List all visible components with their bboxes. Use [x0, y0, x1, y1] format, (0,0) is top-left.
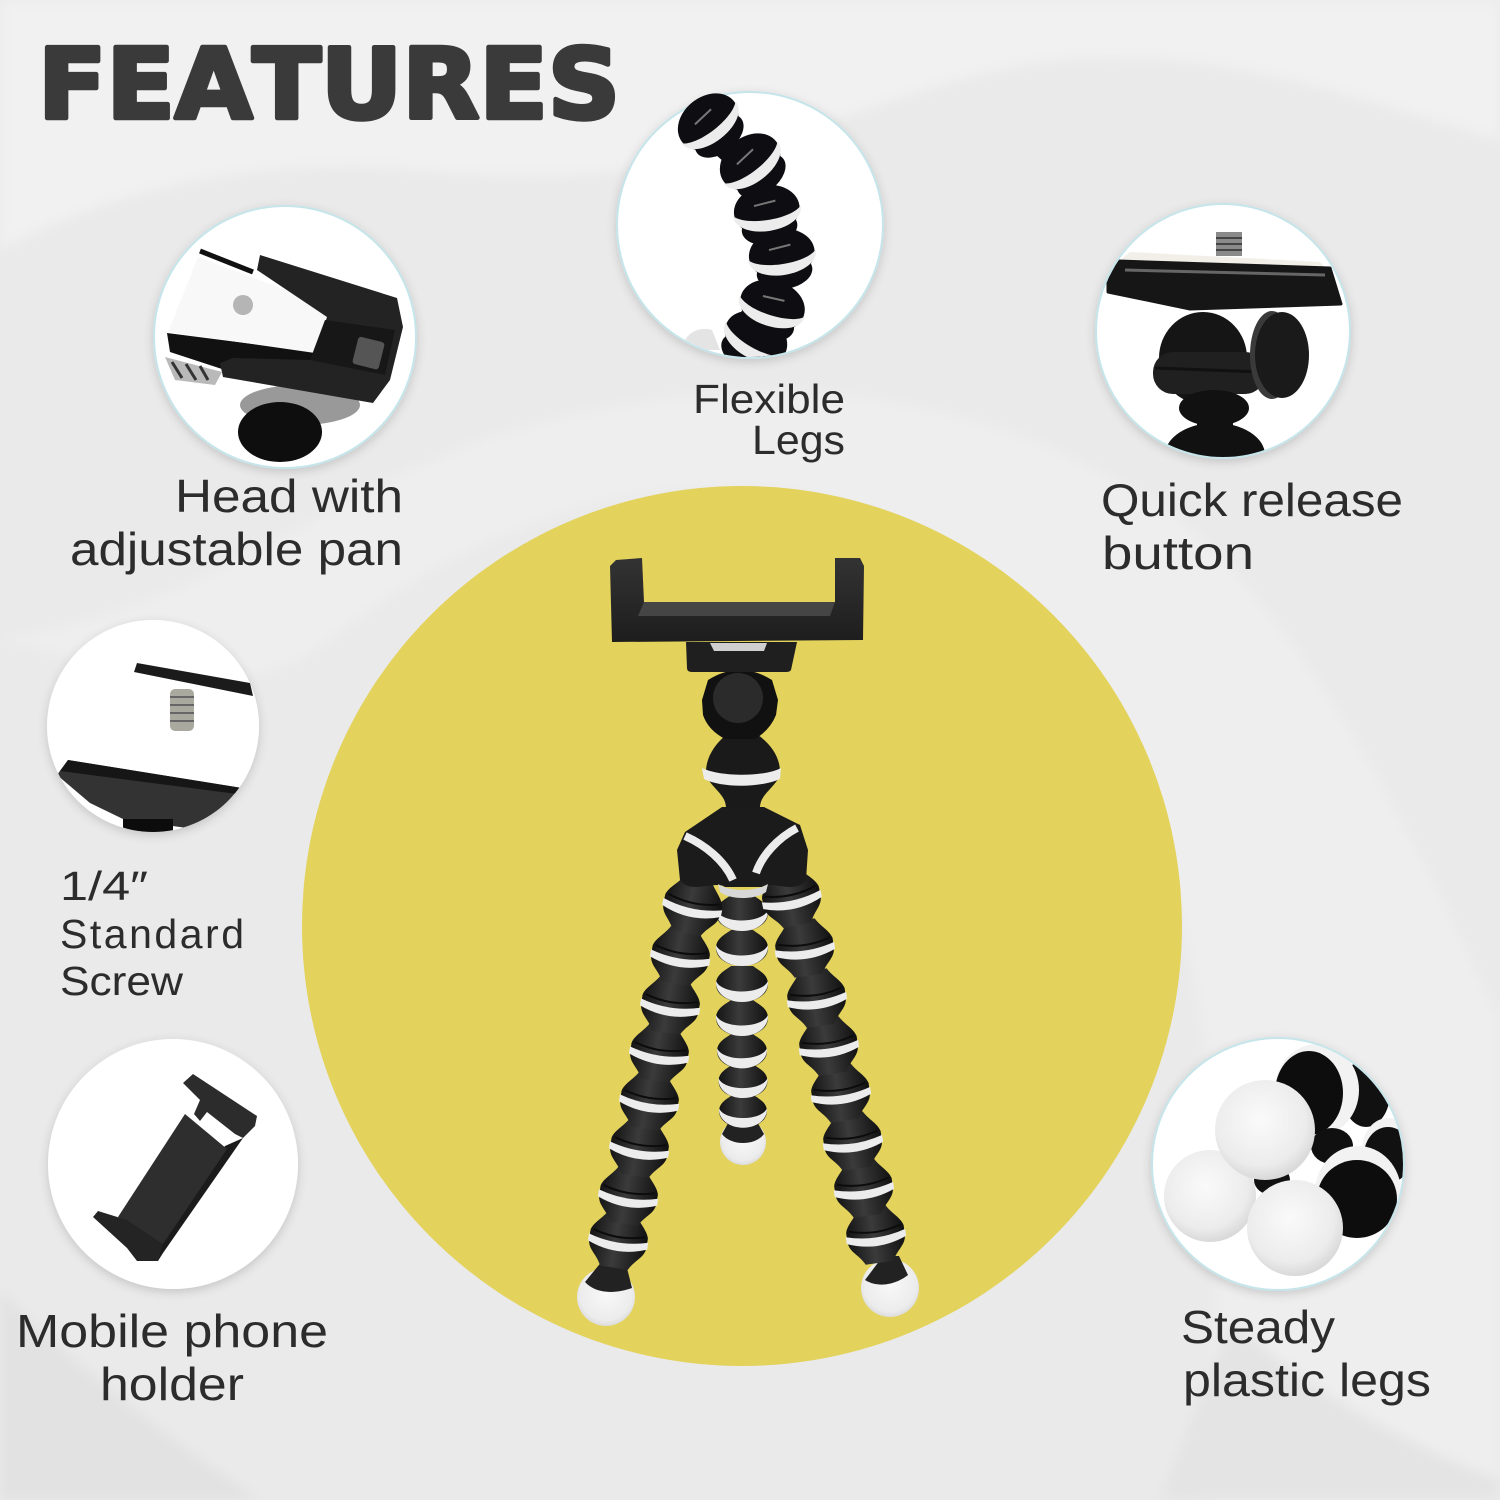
mount plate: [686, 642, 797, 672]
circle: mobile phone holder: [48, 1039, 298, 1289]
main tripod: [577, 558, 919, 1326]
label: standard screw: Standard: [60, 911, 244, 957]
label: mobile phone holder: holder: [100, 1358, 244, 1410]
label: steady plastic legs: Steady: [1181, 1301, 1335, 1353]
label: quick release button: Quick release: [1101, 474, 1403, 526]
label: standard screw: Screw: [60, 958, 183, 1004]
label: steady plastic legs: plastic legs: [1183, 1354, 1431, 1406]
label: quick release button: button: [1102, 527, 1254, 579]
pan head: [702, 670, 778, 739]
title: FEATURES: [38, 28, 620, 141]
label: mobile phone holder: [16, 1305, 328, 1410]
label: head with adjustable pan: Head with: [175, 470, 403, 522]
circle: steady plastic legs: [1152, 1038, 1414, 1290]
center leg: [716, 895, 768, 1165]
label: standard screw: 1/4″: [60, 863, 148, 909]
label: flexible legs: [693, 376, 845, 463]
circle: standard screw: [47, 620, 259, 839]
label: steady plastic legs: [1181, 1301, 1431, 1406]
circle: flexible legs: [617, 81, 883, 385]
hub: [677, 807, 808, 898]
label: flexible legs: Legs: [752, 417, 845, 463]
label: head with adjustable pan: adjustable pan: [70, 523, 403, 575]
right leg: [756, 864, 919, 1317]
label: flexible legs: Flexible: [693, 376, 845, 422]
label: head with adjustable pan: [70, 470, 403, 575]
yellow circle: [302, 486, 1182, 1366]
label: mobile phone holder: Mobile phone: [16, 1305, 328, 1357]
circle: adjustable head: [154, 206, 416, 468]
left leg: [577, 872, 728, 1326]
phone holder: [610, 558, 864, 642]
circle: quick release: [1096, 204, 1350, 487]
neck with band: [702, 735, 781, 808]
label: standard screw: [60, 863, 244, 1004]
label: quick release button: [1101, 474, 1403, 579]
